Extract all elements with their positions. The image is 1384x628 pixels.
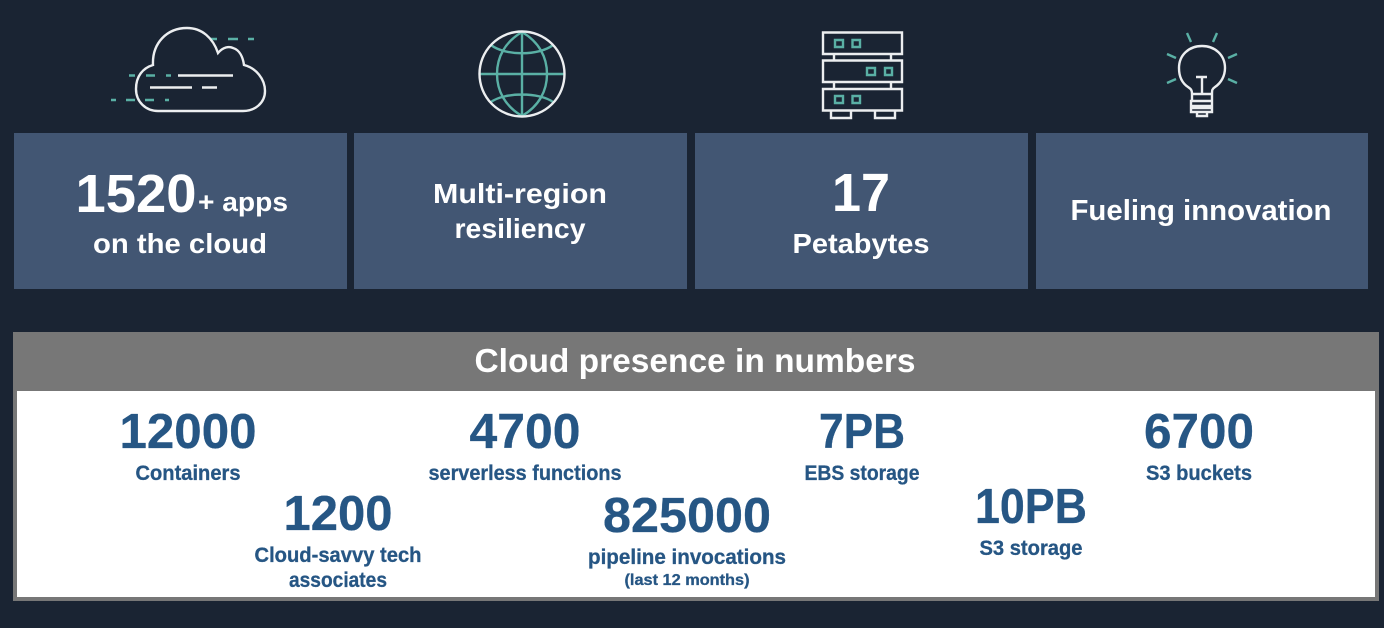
stat: serverless functions: serverless functions bbox=[428, 462, 622, 485]
stat: S3 buckets: S3 buckets bbox=[1146, 462, 1252, 485]
panel: multi-region resiliency: Multi-region bbox=[433, 178, 607, 209]
heading: Cloud presence in numbers bbox=[474, 342, 916, 379]
stat: S3 buckets: 6700 bbox=[1144, 405, 1254, 459]
stat: cloud-savvy associates: associates bbox=[289, 569, 387, 592]
stat: containers: Containers bbox=[136, 462, 240, 485]
icon: globe bbox=[480, 32, 564, 116]
panel: petabytes: 17 bbox=[832, 163, 890, 223]
stat: pipeline invocations: 825000 bbox=[603, 489, 771, 543]
stat: serverless functions: 4700 bbox=[470, 405, 580, 459]
stat: cloud-savvy associates: 1200 bbox=[284, 487, 392, 541]
panel: multi-region resiliency: resiliency bbox=[454, 213, 586, 244]
stat: cloud-savvy associates bbox=[254, 487, 422, 592]
panel: apps on the cloud: + apps bbox=[198, 187, 288, 217]
panel: apps on the cloud bbox=[14, 133, 347, 289]
stat: S3 buckets bbox=[1144, 405, 1254, 485]
panel: apps on the cloud: 1520 bbox=[76, 164, 196, 224]
stat: cloud-savvy associates: Cloud-savvy tech bbox=[254, 544, 422, 567]
stat: S3 storage bbox=[975, 480, 1087, 560]
stat: S3 storage: S3 storage bbox=[980, 537, 1082, 560]
panel: fueling innovation bbox=[1036, 133, 1368, 289]
stat: serverless functions bbox=[428, 405, 622, 485]
stat: pipeline invocations bbox=[588, 489, 786, 589]
stat: EBS storage: EBS storage bbox=[804, 462, 920, 485]
icon: light bulb bbox=[1167, 33, 1237, 116]
panel: cloud presence in numbers bbox=[13, 332, 1379, 601]
stat: S3 storage: 10PB bbox=[975, 480, 1087, 534]
panel: petabytes bbox=[695, 133, 1028, 289]
stat: pipeline invocations: pipeline invocations bbox=[588, 546, 786, 569]
stat: EBS storage bbox=[804, 405, 920, 485]
panel: apps on the cloud: on the cloud bbox=[93, 228, 267, 259]
panel: fueling innovation: Fueling innovation bbox=[1070, 195, 1332, 227]
panel: petabytes: Petabytes bbox=[792, 228, 930, 259]
panel: multi-region resiliency bbox=[354, 133, 687, 289]
stat: EBS storage: 7PB bbox=[819, 405, 905, 459]
icon: server stack bbox=[823, 32, 902, 118]
icon: cloud bbox=[111, 28, 265, 111]
stat: containers: 12000 bbox=[120, 405, 256, 459]
stat: pipeline invocations: (last 12 months) bbox=[624, 572, 750, 589]
stat: containers bbox=[120, 405, 256, 485]
